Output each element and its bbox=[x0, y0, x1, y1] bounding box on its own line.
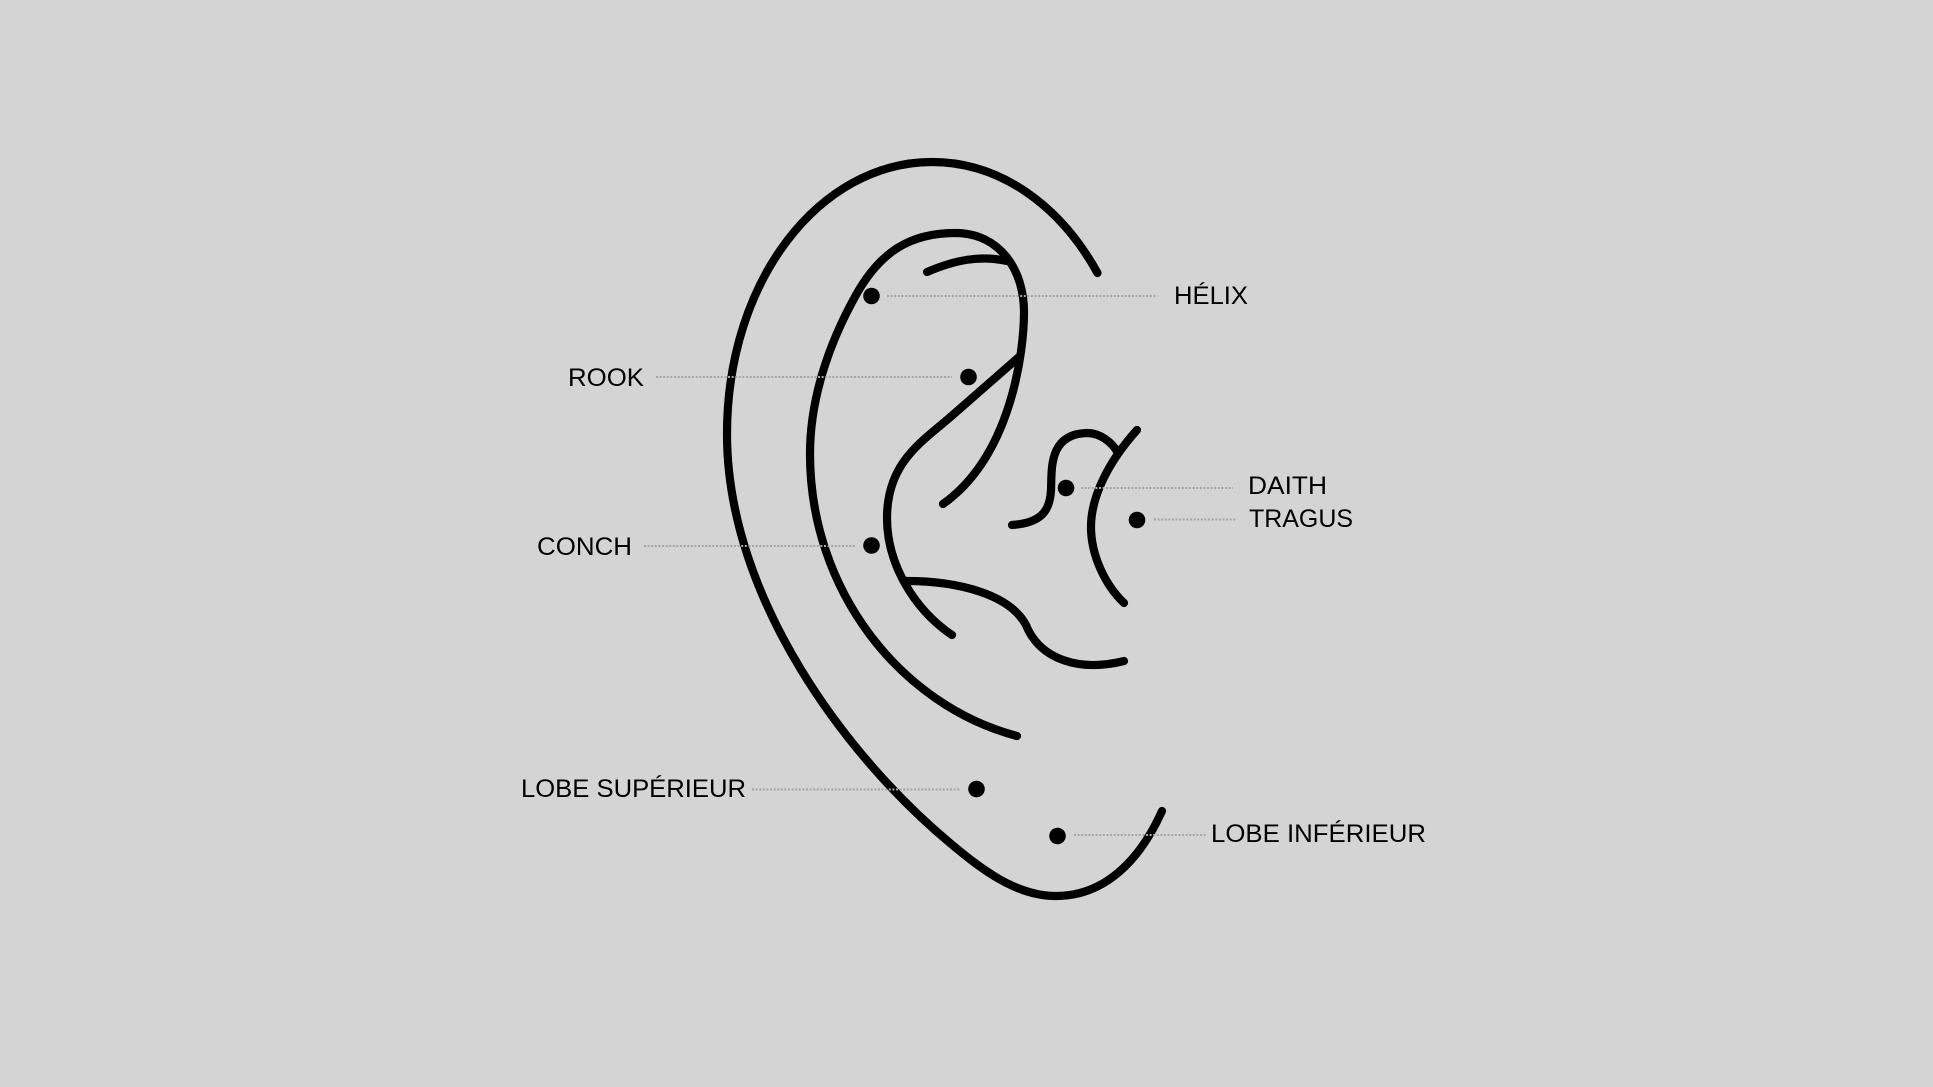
inner antihelix contour bbox=[810, 233, 1024, 736]
piercing dot: helix bbox=[863, 288, 880, 304]
leader line: daith bbox=[1081, 487, 1233, 489]
antitragus curve bbox=[1091, 430, 1137, 603]
piercing dot: tragus bbox=[1129, 512, 1145, 528]
concha curve bbox=[887, 357, 1019, 635]
upper fold bbox=[927, 258, 1007, 272]
leader line: upper lobe bbox=[752, 788, 960, 790]
lower concha curve bbox=[906, 581, 1124, 665]
tragus curve bbox=[1012, 433, 1118, 525]
piercing dot: daith bbox=[1058, 480, 1074, 496]
label: lower lobe: LOBE INFÉRIEUR bbox=[1211, 819, 1426, 848]
leader line: conch bbox=[644, 545, 855, 547]
label: rook: ROOK bbox=[568, 364, 644, 392]
ear drawing bbox=[727, 162, 1162, 896]
label: upper lobe: LOBE SUPÉRIEUR bbox=[521, 774, 746, 803]
label: tragus: TRAGUS bbox=[1249, 505, 1353, 533]
leader line: lower lobe bbox=[1074, 834, 1207, 836]
label: conch: CONCH bbox=[537, 533, 632, 561]
leader line: helix bbox=[887, 295, 1156, 297]
piercing dot: lower lobe bbox=[1049, 828, 1066, 844]
outer helix contour bbox=[727, 162, 1162, 896]
label: daith: DAITH bbox=[1248, 472, 1327, 500]
piercing dot: rook bbox=[960, 369, 977, 385]
label: helix: HÉLIX bbox=[1174, 281, 1248, 310]
piercing dot: upper lobe bbox=[968, 781, 985, 797]
leader line: tragus bbox=[1154, 518, 1236, 520]
piercing dot: conch bbox=[863, 537, 880, 554]
leader line: rook bbox=[656, 376, 952, 378]
